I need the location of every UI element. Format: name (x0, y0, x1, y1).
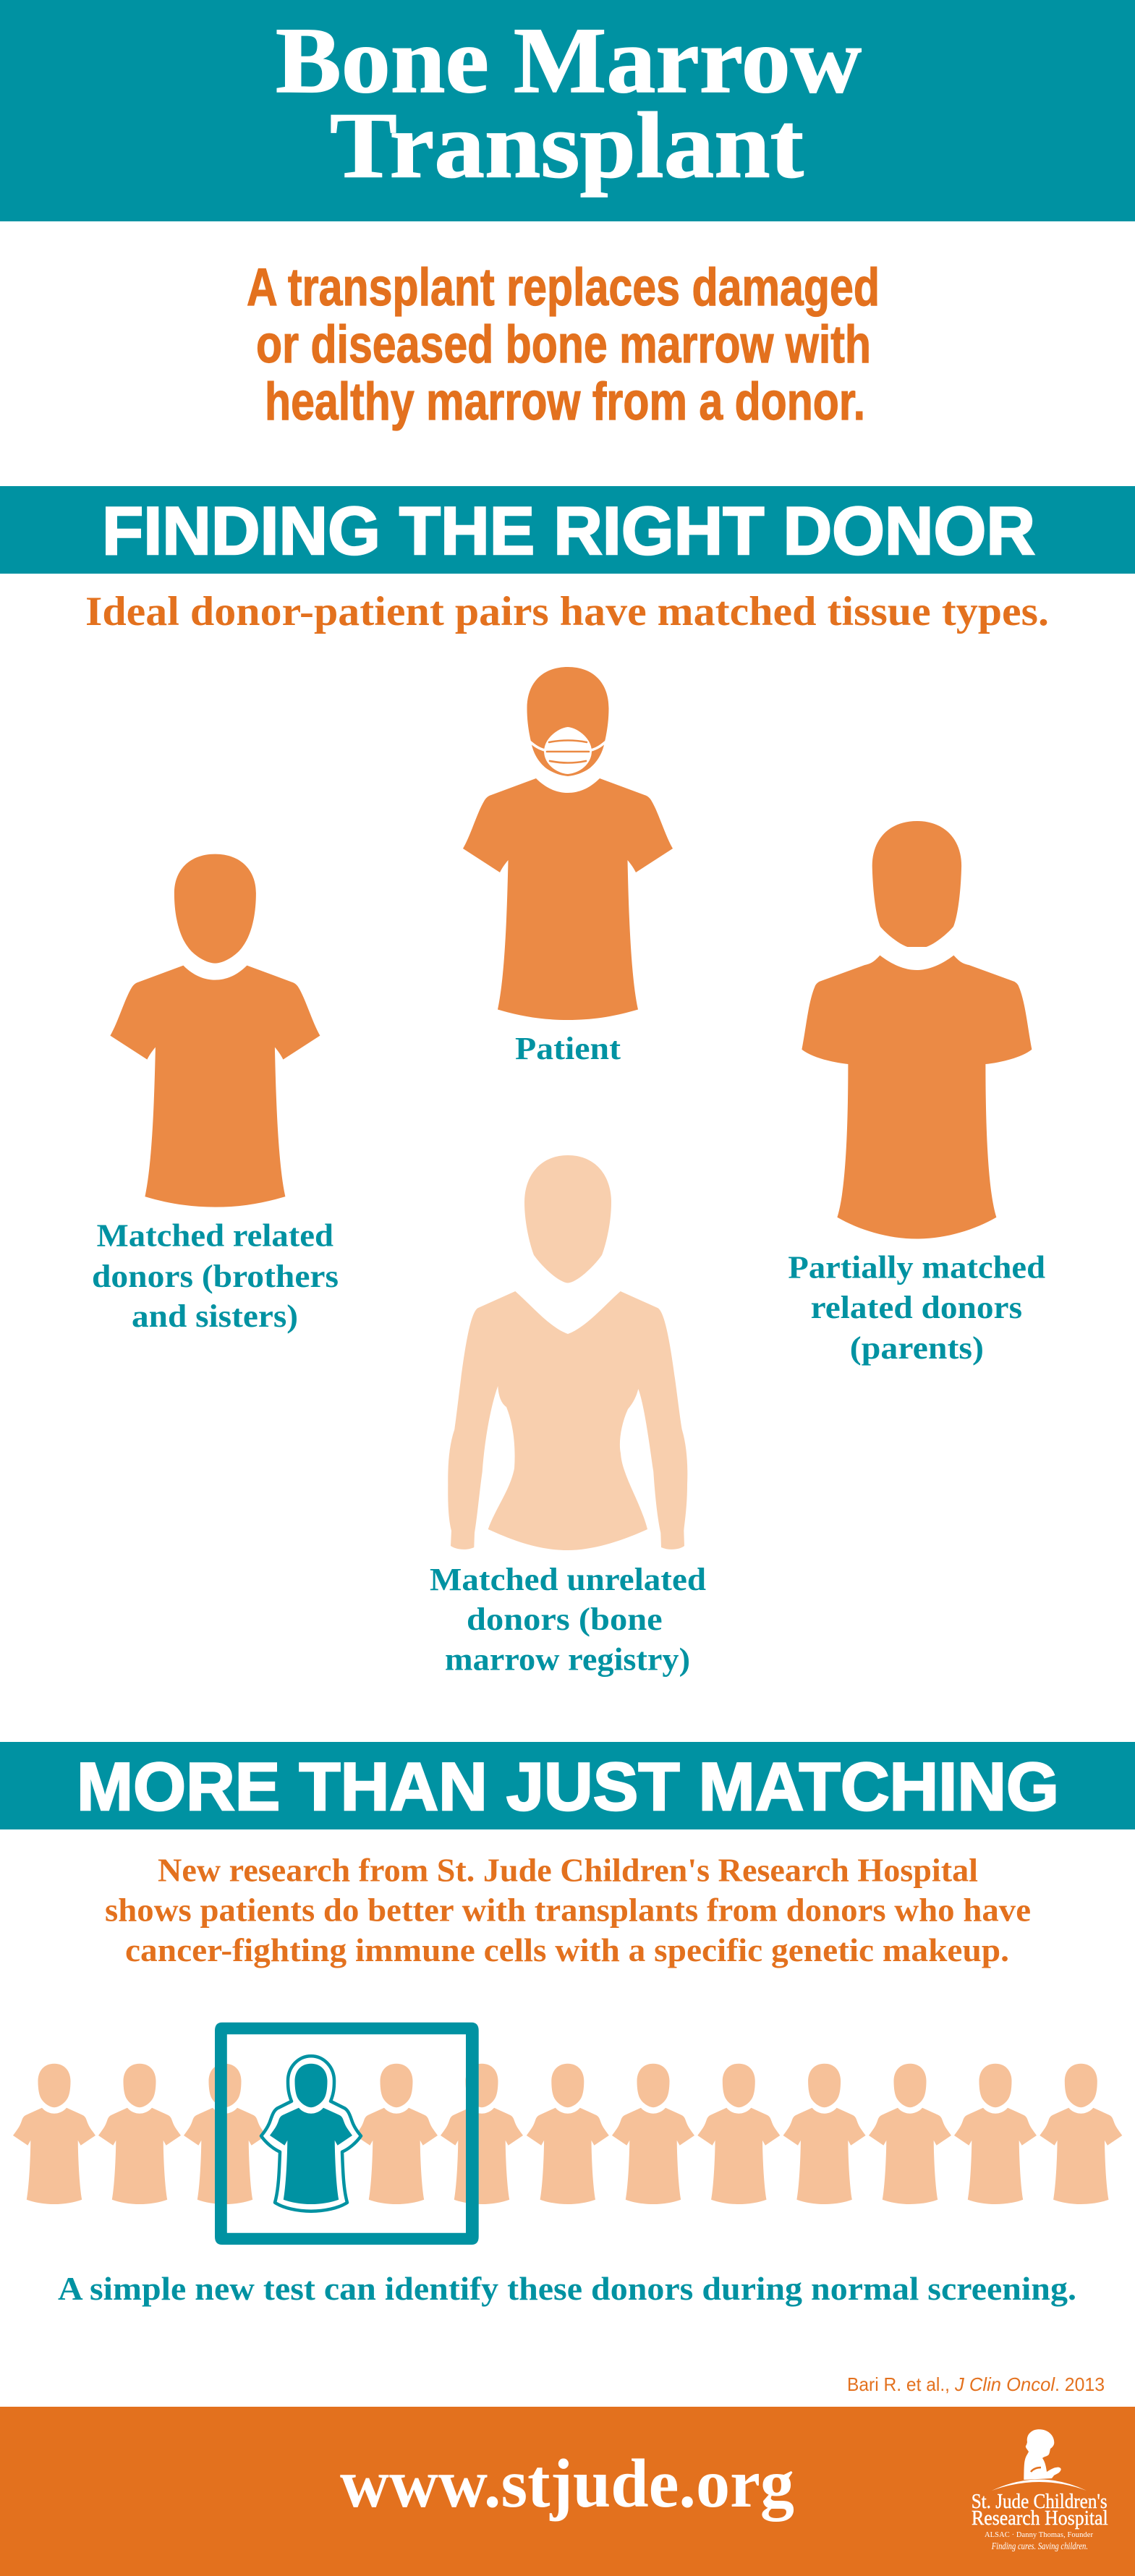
icon: highlighted matching donor (261, 2056, 361, 2211)
title (276, 9, 862, 198)
research text: New research from St. Jude Children's Research Hospital (158, 1852, 978, 1889)
citation: . 2013 (1055, 2373, 1105, 2395)
citation: J Clin Oncol (954, 2373, 1055, 2395)
panel: more than just matching heading: MORE THAN JUST MATCHING (77, 1748, 1059, 1824)
logo: St. Jude Children's Research Hospital: St. Jude Children's (972, 2491, 1108, 2513)
icon: registry donor (448, 1155, 687, 1550)
citation (847, 2373, 1105, 2395)
label: matched unrelated donors: Matched unrelated (430, 1562, 706, 1597)
icon: patient with mask (463, 667, 673, 1020)
panel: finding the right donor heading: FINDING THE RIGHT DONOR (102, 493, 1035, 569)
citation: Bari R. et al., (847, 2373, 950, 2395)
icon: parent donor (802, 821, 1032, 1238)
research text: cancer-fighting immune cells with a specific genetic makeup. (125, 1931, 1009, 1968)
title: Transplant (330, 94, 804, 198)
logo: St. Jude Children's Research Hospital: Finding cures. Saving children. (991, 2541, 1088, 2552)
figure: patient (463, 667, 673, 1066)
label: matched unrelated donors (430, 1562, 706, 1678)
intro text (247, 258, 880, 431)
research text (105, 1852, 1031, 1968)
label: partially matched related donors: (parents) (850, 1330, 984, 1366)
figure: partially matched related donors (788, 821, 1045, 1366)
label: matched related donors: Matched related (97, 1218, 333, 1254)
intro text: A transplant replaces damaged (247, 258, 880, 317)
panel: header (0, 0, 1135, 221)
subheading: matched tissue types: Ideal donor-patient pairs have matched tissue types. (85, 589, 1049, 634)
label: matched related donors: and sisters) (132, 1298, 298, 1334)
website url: www.stjude.org (340, 2445, 794, 2522)
research text: shows patients do better with transplants from donors who have (105, 1892, 1031, 1929)
test caption: A simple new test can identify these donors during normal screening. (58, 2270, 1076, 2307)
figure: matched related donors (92, 854, 339, 1334)
logo: St. Jude Children's Research Hospital: ALSAC · Danny Thomas, Founder (985, 2531, 1094, 2539)
logo: St. Jude Children's Research Hospital (972, 2429, 1108, 2552)
panel: footer (0, 2407, 1135, 2576)
icon: child silhouette (1024, 2429, 1061, 2480)
label: patient: Patient (515, 1031, 621, 1066)
figure: matched unrelated donors (430, 1155, 706, 1678)
label: matched unrelated donors: donors (bone (467, 1602, 663, 1637)
selection frame (215, 2023, 479, 2245)
logo: St. Jude Children's Research Hospital: Research Hospital (972, 2507, 1108, 2530)
label: partially matched related donors: related donors (811, 1290, 1022, 1325)
label: matched unrelated donors: marrow registry) (445, 1642, 690, 1678)
label: partially matched related donors: Partially matched (788, 1250, 1045, 1285)
label: matched related donors (92, 1218, 339, 1334)
title: Bone Marrow (276, 9, 862, 113)
intro text: or diseased bone marrow with (256, 315, 871, 374)
intro text: healthy marrow from a donor. (265, 373, 865, 431)
label: partially matched related donors (788, 1250, 1045, 1366)
icon: sibling donor (110, 854, 320, 1207)
row of donor figures (13, 2064, 1122, 2204)
label: matched related donors: donors (brothers (92, 1259, 339, 1294)
